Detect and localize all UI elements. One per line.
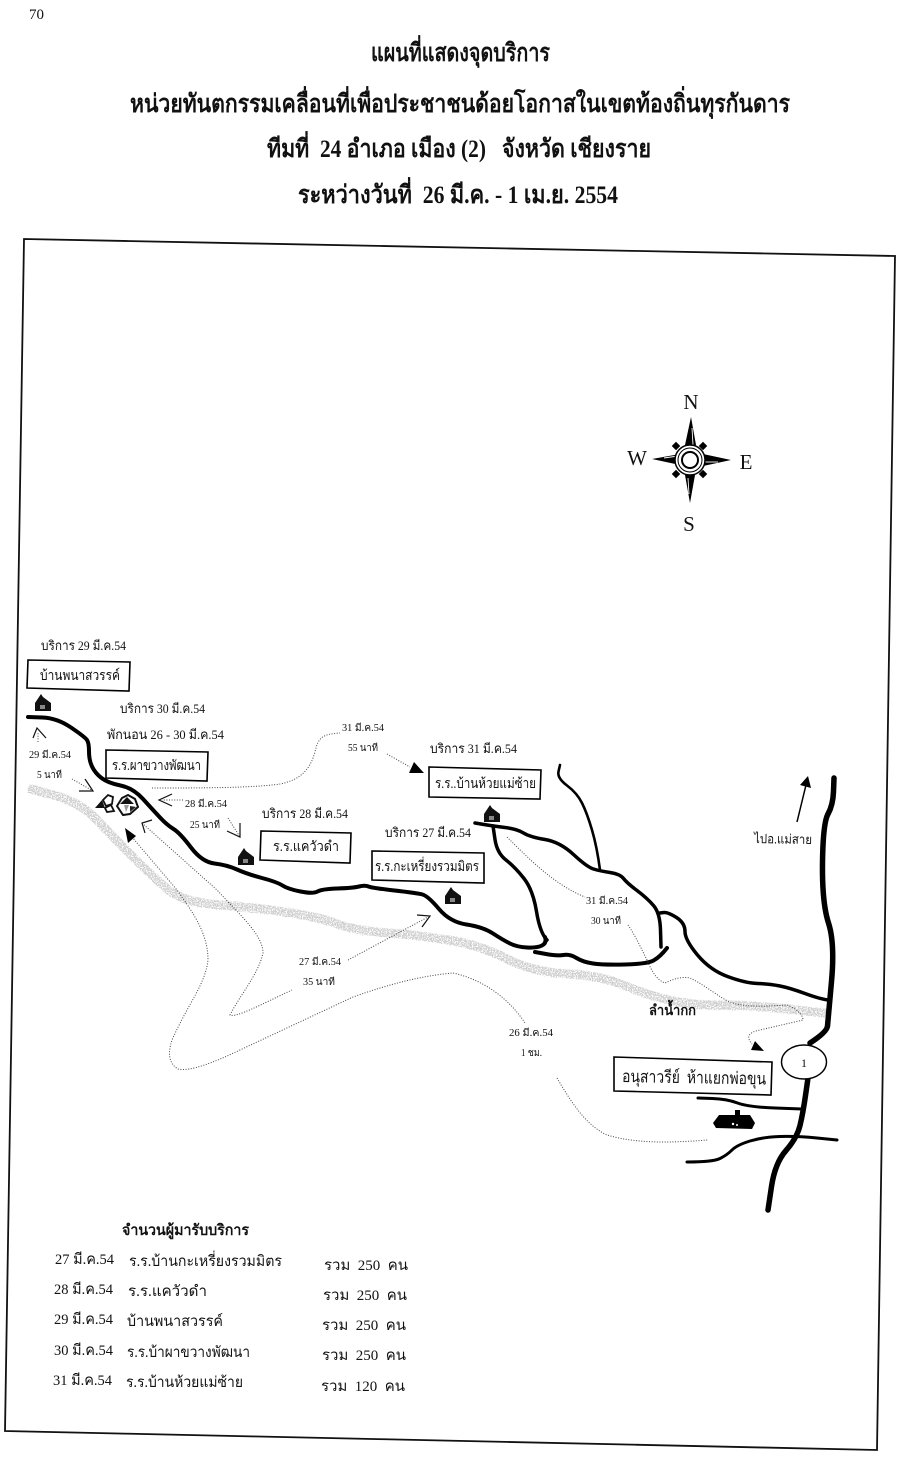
label: Khae Wua Dam school: ร.ร.แควัวดำ [273, 840, 339, 855]
label: Pha Khwang Phatthana school: บริการ 30 มี.ค.54 [120, 701, 205, 716]
label: Pha Khwang Phatthana school: ร.ร.ผาขวางพัฒนา [112, 759, 201, 774]
rows: ร.ร.บ้านกะเหรี่ยงรวมมิตร [129, 1250, 282, 1270]
compass rose: E [740, 450, 752, 474]
title [130, 35, 790, 209]
icon: house Khae Wua Dam [238, 848, 254, 865]
roads [28, 717, 837, 1210]
rows: รวม 250 คน [323, 1288, 407, 1304]
travel time labels: 55 นาที [348, 742, 378, 754]
icon: house Karen Ruam Mit [445, 887, 461, 904]
icon: house Ban Phana Sawan [35, 694, 51, 711]
icon: camp tents [95, 795, 138, 815]
icon: monument building [713, 1110, 755, 1129]
rows: ร.ร.บ้านห้วยแม่ซ้าย [126, 1374, 243, 1391]
rows: รวม 120 คน [321, 1379, 405, 1395]
rows: บ้านพนาสวรรค์ [127, 1313, 223, 1330]
travel time labels: 26 มี.ค.54 [509, 1027, 553, 1039]
label: Ha Yaek Pho Khun monument [614, 1057, 772, 1095]
page number: 70 [29, 7, 44, 23]
label: Huai Mae Sai school [429, 741, 541, 799]
label: Ban Phana Sawan [27, 638, 130, 691]
river name: ลำน้ำกก [649, 999, 696, 1019]
rows: รวม 250 คน [322, 1348, 406, 1364]
compass rose: W [627, 446, 647, 470]
table heading: จำนวนผู้มารับบริการ [122, 1221, 250, 1240]
travel time labels: 28 มี.ค.54 [185, 798, 227, 810]
label: Ban Phana Sawan: บริการ 29 มี.ค.54 [41, 638, 126, 653]
travel time labels: 31 มี.ค.54 [586, 895, 628, 907]
label: Ha Yaek Pho Khun monument: อนุสาวรีย์ ห้าแยกพ่อขุน [622, 1067, 767, 1090]
rows: รวม 250 คน [324, 1258, 408, 1274]
title: ระหว่างวันที่ 26 มี.ค. - 1 เม.ย. 2554 [298, 177, 618, 209]
label: Pha Khwang Phatthana school: พักนอน 26 - 30 มี.ค.54 [107, 727, 224, 742]
arrowheads [33, 728, 764, 1051]
direction arrow: to Mae Sai: ไปอ.แม่สาย [753, 831, 812, 847]
rows: 28 มี.ค.54 [54, 1281, 113, 1298]
route marker 1: 1 [801, 1056, 807, 1070]
rows: ร.ร.แควัวดำ [128, 1283, 207, 1300]
label: Huai Mae Sai school: ร.ร..บ้านห้วยแม่ซ้าย [435, 776, 536, 792]
direction arrow: to Mae Sai [753, 776, 812, 847]
rows: 27 มี.ค.54 [55, 1251, 114, 1268]
label: Ban Phana Sawan: บ้านพนาสวรรค์ [40, 667, 120, 684]
table: number of people served [53, 1221, 408, 1395]
title: หน่วยทันตกรรมเคลื่อนที่เพื่อประชาชนด้อยโอกาสในเขตท้องถิ่นทุรกันดาร [130, 86, 790, 120]
rows: 29 มี.ค.54 [54, 1311, 113, 1328]
label: Khae Wua Dam school [260, 806, 351, 863]
label: Karen Ruam Mit school: ร.ร.กะเหรี่ยงรวมมิตร [375, 857, 479, 875]
dotted travel routes [38, 732, 803, 1142]
label: Khae Wua Dam school: บริการ 28 มี.ค.54 [262, 806, 348, 821]
travel time labels: 27 มี.ค.54 [299, 956, 341, 968]
travel time labels: 29 มี.ค.54 [29, 749, 71, 761]
label: Karen Ruam Mit school: บริการ 27 มี.ค.54 [385, 825, 471, 840]
river [28, 788, 827, 1013]
compass rose: N [683, 390, 699, 414]
travel time labels: 30 นาที [591, 915, 621, 927]
travel time labels: 31 มี.ค.54 [342, 722, 384, 734]
label: Pha Khwang Phatthana school [106, 701, 224, 781]
travel time labels: 25 นาที [190, 819, 220, 831]
compass rose: S [683, 512, 695, 536]
rows: รวม 250 คน [322, 1318, 406, 1334]
travel time labels: 5 นาที [37, 769, 62, 781]
compass rose [627, 390, 752, 536]
travel time labels: 35 นาที [303, 976, 335, 988]
icon: house Huai Mae Sai [484, 805, 500, 822]
title: แผนที่แสดงจุดบริการ [371, 35, 550, 69]
label: Huai Mae Sai school: บริการ 31 มี.ค.54 [430, 741, 517, 756]
rows: 30 มี.ค.54 [54, 1342, 113, 1359]
rows [53, 1250, 408, 1395]
label: Karen Ruam Mit school [372, 825, 484, 883]
rows: 31 มี.ค.54 [53, 1372, 112, 1389]
rows: ร.ร.บ้าผาขวางพัฒนา [127, 1344, 250, 1361]
travel time labels [29, 722, 628, 1059]
travel time labels: 1 ชม. [521, 1048, 542, 1059]
title: ทีมที่ 24 อำเภอ เมือง (2) จังหวัด เชียงราย [267, 131, 651, 163]
route marker 1 [782, 1045, 826, 1079]
